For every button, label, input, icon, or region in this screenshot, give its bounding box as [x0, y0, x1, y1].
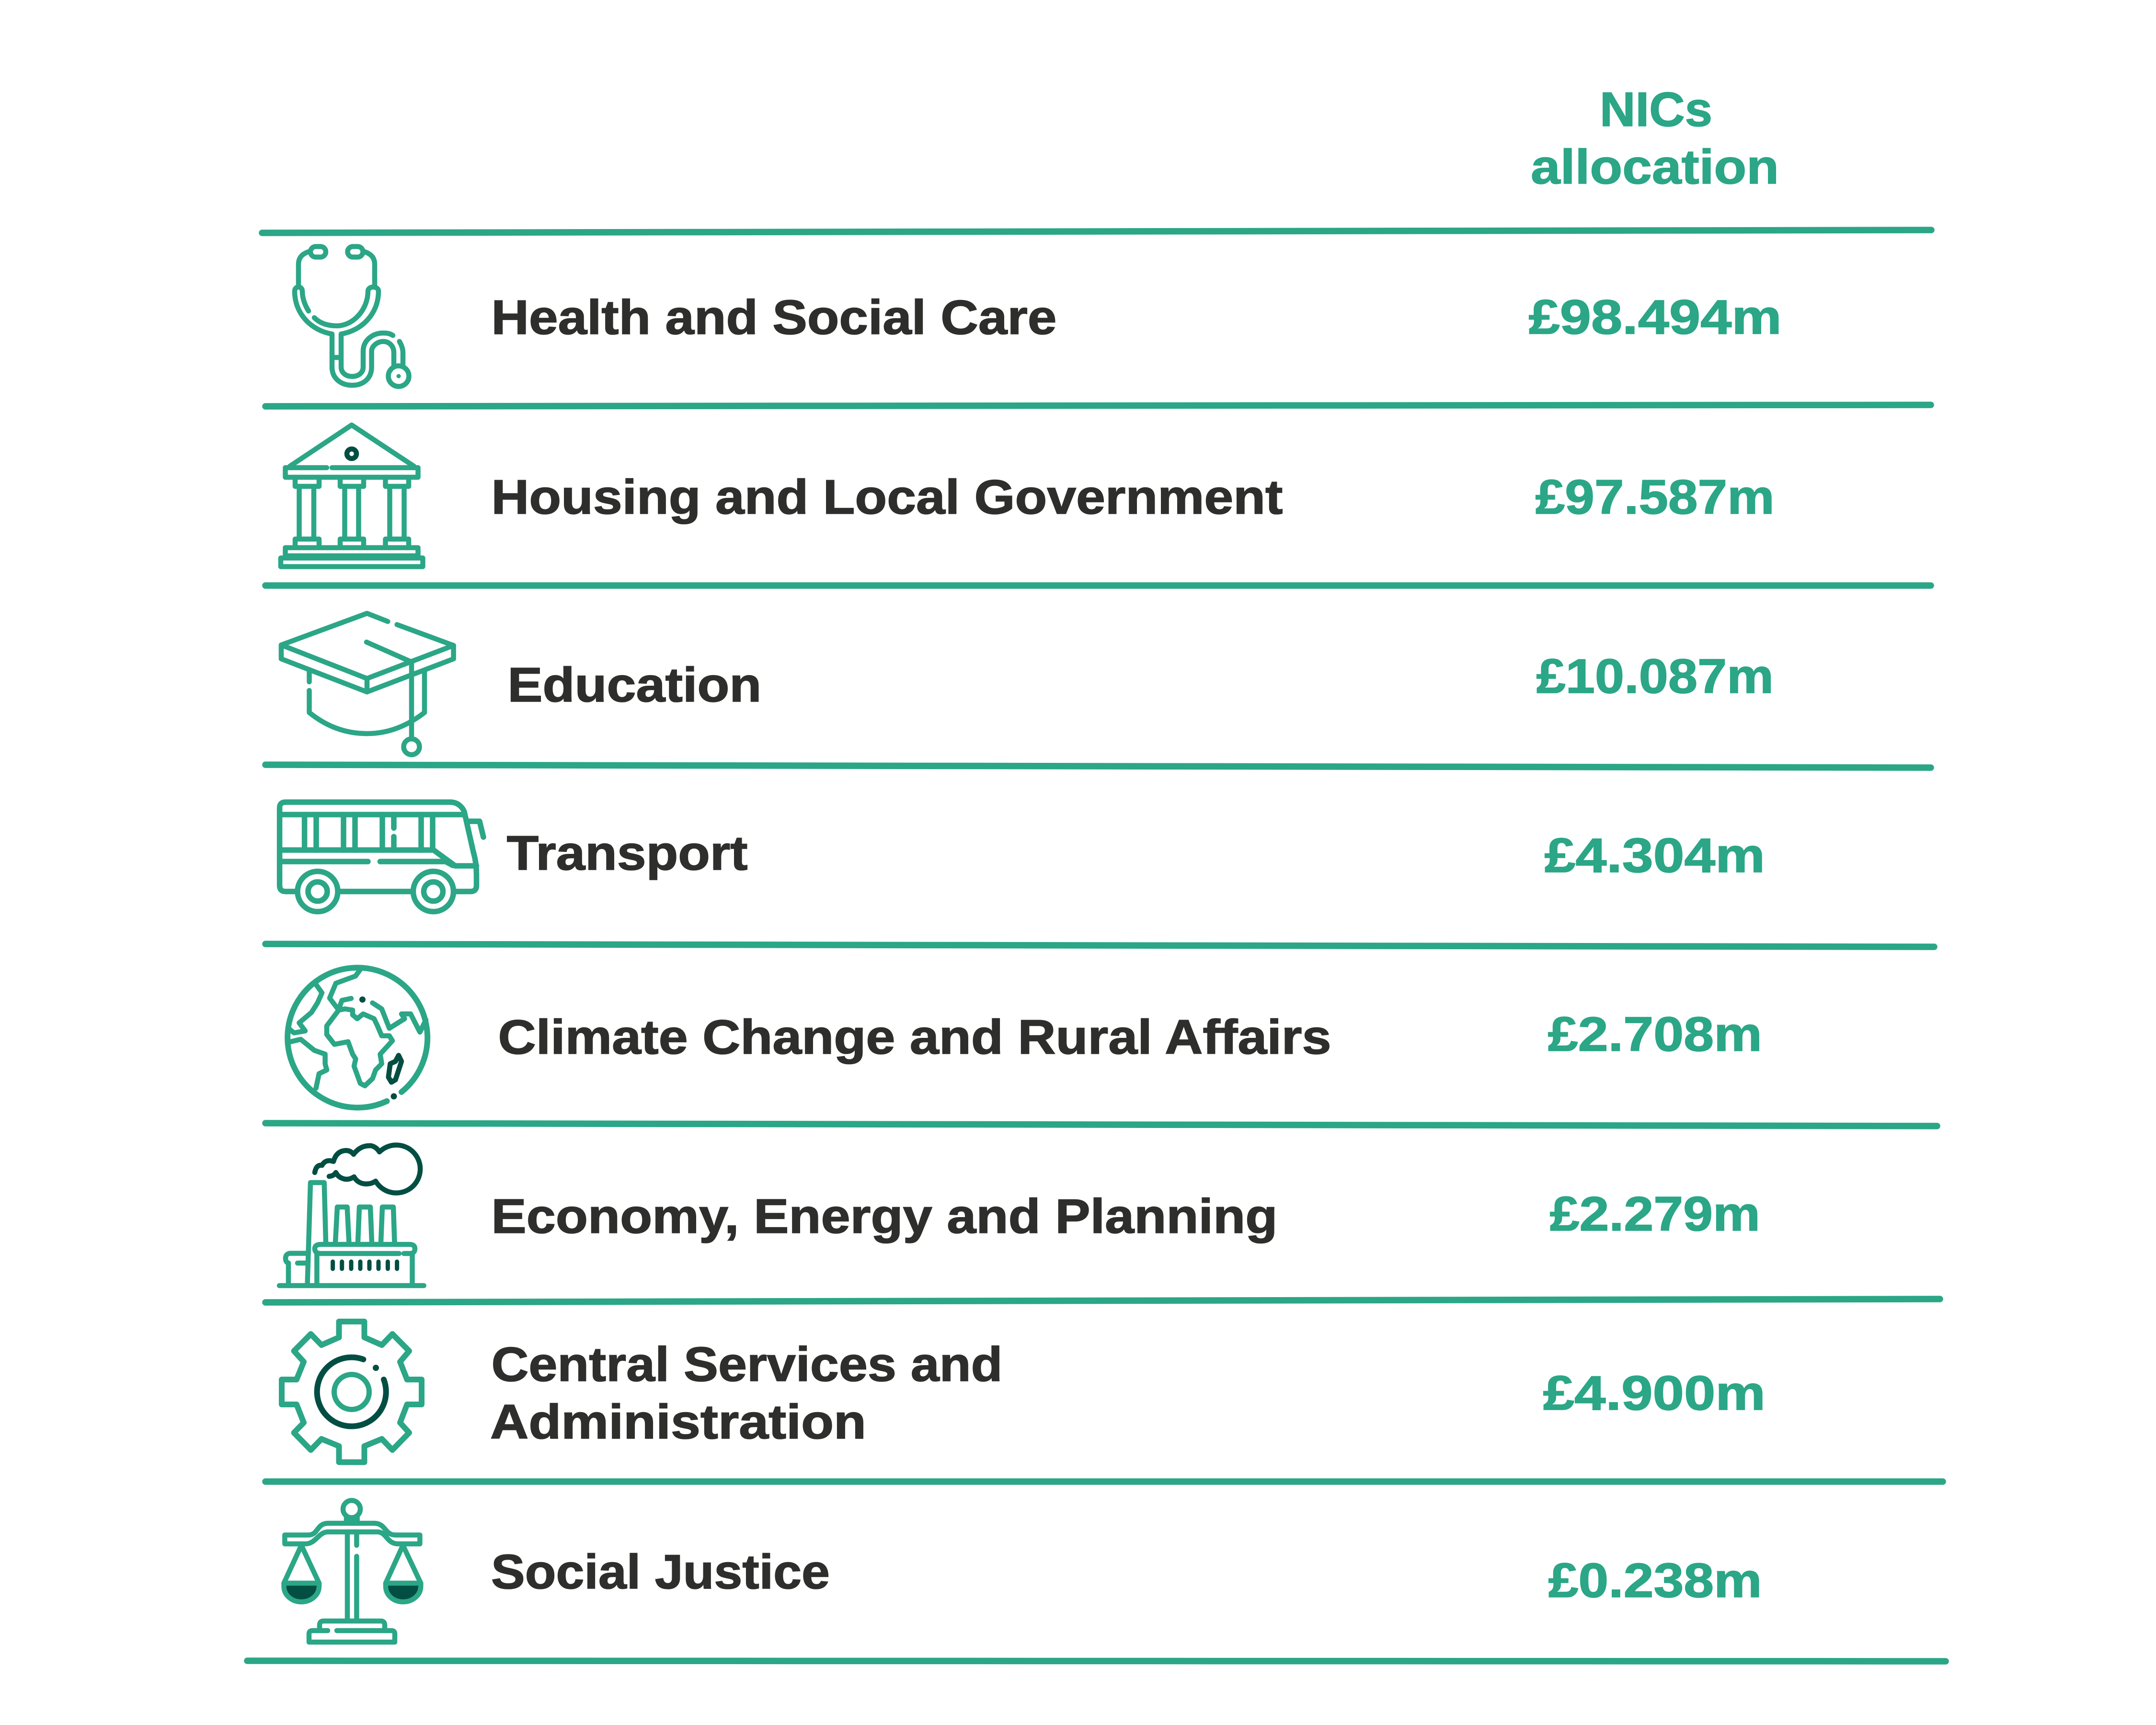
column heading: NICs allocation: NICs [1600, 83, 1712, 137]
row: Central Services and Administration [282, 1322, 1766, 1462]
icon: balance scales [284, 1500, 421, 1642]
value: £97.587m [1536, 471, 1775, 524]
value: £98.494m [1529, 290, 1782, 344]
row: Social Justice [284, 1500, 1762, 1642]
label: Transport [507, 827, 748, 880]
value: £0.238m [1548, 1554, 1762, 1608]
label [490, 1338, 1002, 1449]
value: £2.708m [1548, 1008, 1762, 1061]
label: Housing and Local Government [491, 471, 1283, 524]
icon: factory with smoke [279, 1145, 424, 1286]
label: Central Services and [492, 1338, 1002, 1392]
row: Housing and Local Government [281, 425, 1775, 566]
column heading: NICs allocation: allocation [1531, 140, 1779, 194]
label: Administration [490, 1395, 866, 1449]
value: £4.900m [1543, 1367, 1766, 1420]
value: £10.087m [1537, 650, 1774, 703]
row: Climate Change and Rural Affairs [287, 967, 1762, 1108]
icon: stethoscope [295, 246, 409, 386]
icon: classical bank building [281, 425, 423, 566]
column heading: NICs allocation [1531, 83, 1779, 194]
row: Health and Social Care [295, 246, 1782, 386]
label: Education [507, 658, 761, 712]
row: Transport [280, 802, 1765, 911]
label: Social Justice [491, 1545, 830, 1599]
row: Economy, Energy and Planning [279, 1145, 1760, 1286]
icon: bus [280, 802, 483, 911]
icon: globe [287, 967, 427, 1108]
label: Climate Change and Rural Affairs [498, 1011, 1331, 1064]
label: Health and Social Care [491, 291, 1056, 345]
row: Education [281, 613, 1774, 755]
value: £4.304m [1545, 829, 1765, 883]
icon: gear [282, 1322, 422, 1462]
label: Economy, Energy and Planning [491, 1190, 1277, 1243]
value: £2.279m [1550, 1187, 1760, 1241]
icon: graduation cap [281, 613, 454, 755]
